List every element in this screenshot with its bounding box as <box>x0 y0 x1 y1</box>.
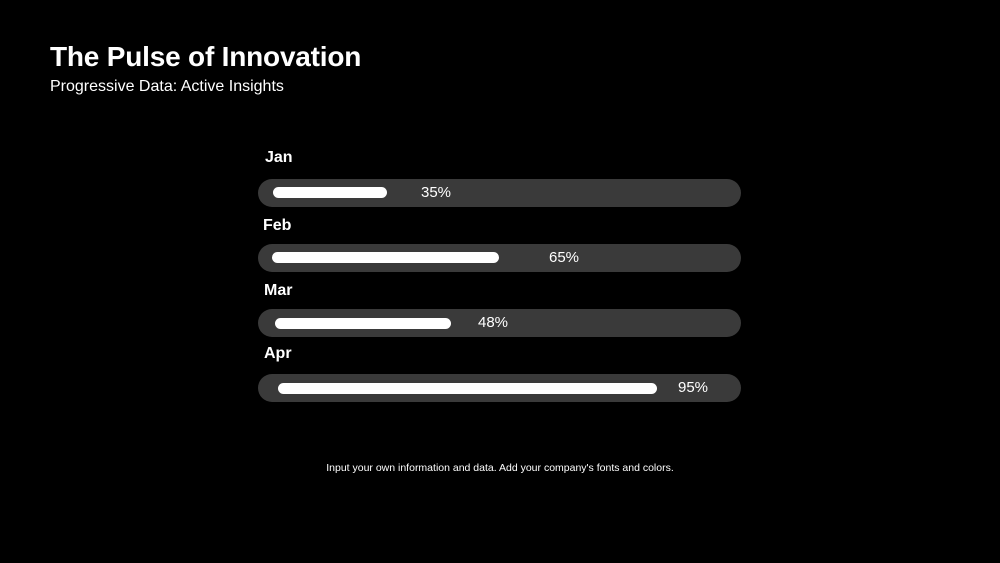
fill: Mar <box>275 318 451 329</box>
label: Mar: Mar <box>264 282 292 299</box>
bar: Jan <box>258 179 741 207</box>
label: Jan: Jan <box>265 149 293 166</box>
bar: Mar <box>258 309 741 337</box>
bar: Apr <box>258 374 741 402</box>
label: Apr: Apr <box>264 345 292 362</box>
subtitle: Progressive Data: Active Insights <box>50 78 284 95</box>
footer note: Input your own information and data. Add your company's fonts and colors. <box>326 462 674 474</box>
fill: Feb <box>272 252 499 263</box>
value: Mar: 48% <box>478 314 508 331</box>
bar: Feb <box>258 244 741 272</box>
fill: Jan <box>273 187 387 198</box>
value: Apr: 95% <box>678 379 708 396</box>
value: Jan: 35% <box>421 184 451 201</box>
value: Feb: 65% <box>549 249 579 266</box>
label: Feb: Feb <box>263 217 291 234</box>
fill: Apr <box>278 383 657 394</box>
title: The Pulse of Innovation <box>50 41 361 72</box>
